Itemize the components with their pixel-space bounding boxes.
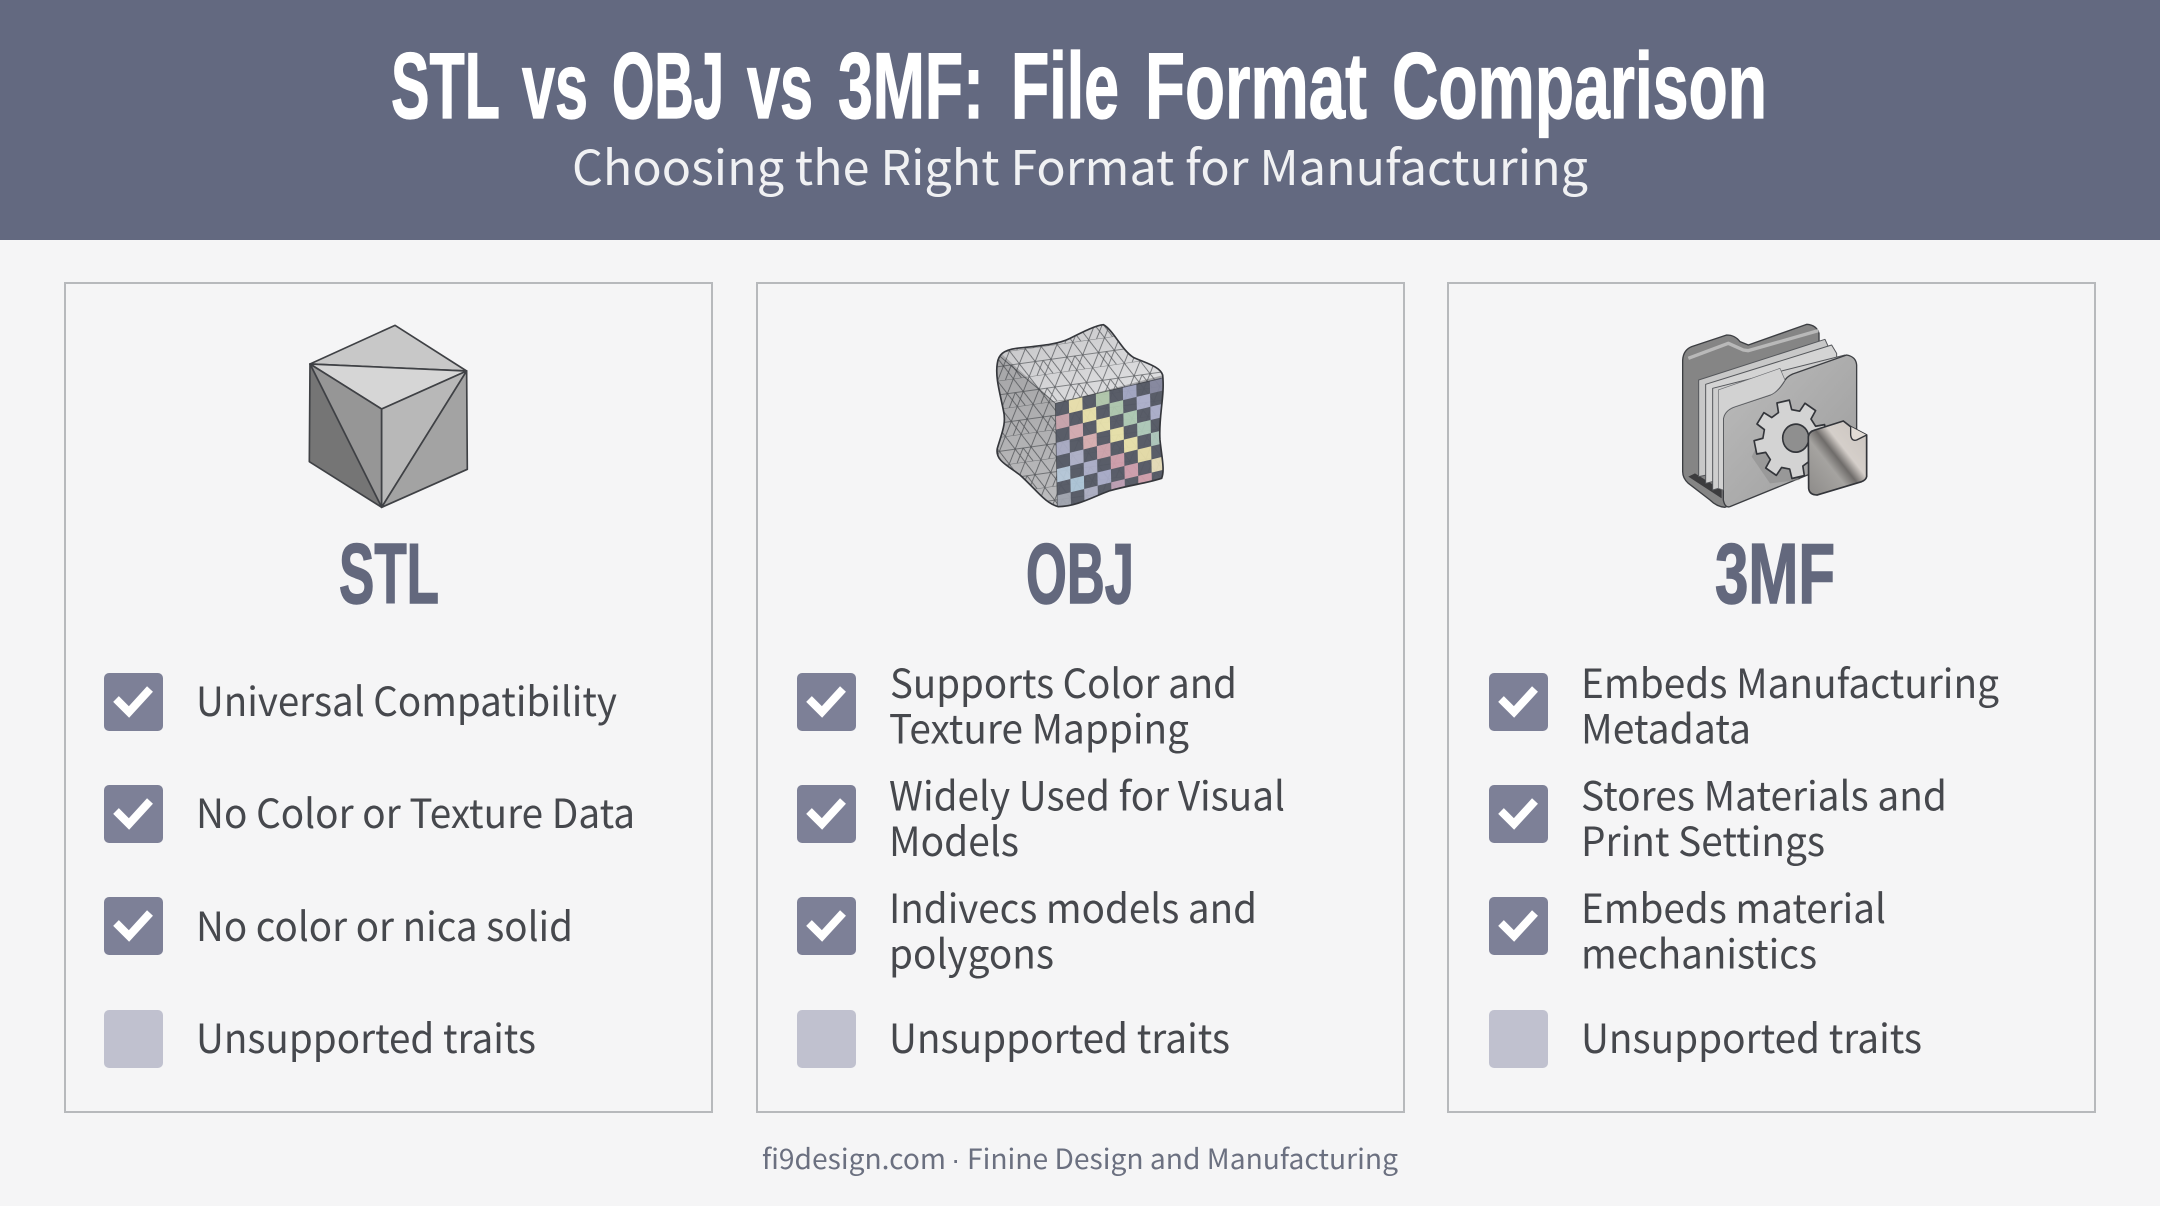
checklist row: Widely Used for Visual Models: Widely Used for Visual (889, 764, 1285, 822)
title: 3MF: (838, 33, 984, 138)
footer credit: Finine Design and Manufacturing (967, 1138, 1398, 1178)
checklist row: Unsupported traits: Unsupported traits (1581, 1007, 1922, 1065)
heading: 3MF: 3MF (1715, 527, 1835, 622)
title: vs (747, 33, 813, 138)
title: Format (1145, 33, 1367, 138)
checklist row: Embeds Manufacturing Metadata: Metadata (1581, 698, 1751, 756)
checklist row: Widely Used for Visual Models: Models (889, 810, 1019, 868)
checklist row: Widely Used for Visual Models (797, 764, 1285, 868)
checklist row: Supports Color and Texture Mapping: Texture Mapping (889, 698, 1189, 756)
checklist row: Embeds material mechanistics: Embeds material (1581, 877, 1886, 935)
footer credit: · (951, 1144, 960, 1175)
checklist row: Embeds material mechanistics (1489, 877, 1886, 980)
checklist row: Stores Materials and Print Settings (1489, 764, 1947, 868)
checklist row: Indivecs models and polygons (797, 877, 1257, 980)
checklist row: Indivecs models and polygons: Indivecs models and (889, 877, 1257, 935)
checklist row: No color or nica solid: No color or nica solid (196, 895, 573, 953)
checklist row: Supports Color and Texture Mapping (797, 652, 1237, 756)
title: Comparison (1392, 33, 1767, 138)
title (391, 33, 1767, 138)
footer credit (762, 1138, 1398, 1178)
icon: triangulated cube (309, 325, 467, 507)
checklist row: No Color or Texture Data: No Color or Texture Data (196, 782, 635, 840)
checklist row: Embeds material mechanistics: mechanistics (1581, 922, 1817, 980)
document (1808, 421, 1867, 495)
checklist row: Unsupported traits: Unsupported traits (889, 1007, 1230, 1065)
gear (1748, 394, 1833, 485)
subtitle: Choosing the Right Format for Manufacturing (572, 129, 1588, 199)
checklist row: Supports Color and Texture Mapping: Supports Color and (890, 652, 1237, 710)
header banner (0, 0, 2160, 240)
heading: OBJ: OBJ (1026, 527, 1134, 622)
title: STL (391, 33, 500, 138)
icon: textured mesh blob (996, 324, 1164, 508)
panel: 3MF (1448, 283, 2095, 1112)
title: OBJ (612, 33, 724, 138)
heading: STL: STL (339, 527, 439, 622)
checklist row: Embeds Manufacturing Metadata (1489, 652, 1999, 756)
panel: OBJ (757, 283, 1404, 1112)
checklist row: Unsupported traits: Unsupported traits (196, 1007, 536, 1065)
checklist row: Indivecs models and polygons: polygons (889, 922, 1054, 980)
checklist row: Universal Compatibility: Universal Compatibility (196, 670, 617, 728)
checklist row: Embeds Manufacturing Metadata: Embeds Manufacturing (1581, 652, 1999, 710)
checklist row: Stores Materials and Print Settings: Print Settings (1581, 810, 1825, 868)
checklist row: Stores Materials and Print Settings: Stores Materials and (1581, 764, 1947, 822)
panel: STL (65, 283, 712, 1112)
icon: folder with gear and document (1683, 324, 1867, 507)
title: File (1011, 33, 1119, 138)
title: vs (522, 33, 588, 138)
footer credit: fi9design.com (762, 1138, 946, 1178)
